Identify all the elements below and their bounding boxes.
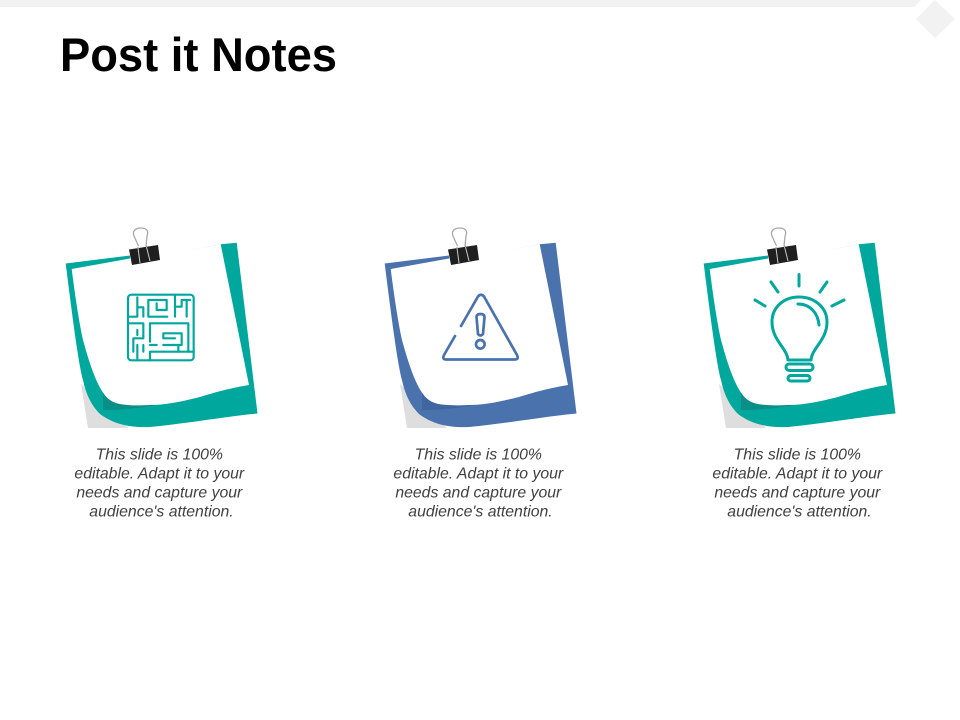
icon: maze xyxy=(128,295,194,360)
caption 2: editable. Adapt it to your xyxy=(393,466,564,482)
caption 1: editable. Adapt it to your xyxy=(74,466,245,482)
panel: note 1 maze xyxy=(66,228,258,520)
caption 3: needs and capture your xyxy=(714,484,881,502)
caption 2: audience's attention. xyxy=(408,504,553,520)
caption 3: audience's attention. xyxy=(727,504,872,520)
panel: note 2 warning xyxy=(385,228,576,520)
caption 2: needs and capture your xyxy=(395,484,562,502)
note 1 paper xyxy=(66,243,258,428)
note 2 paper xyxy=(385,243,576,428)
panel: note 3 lightbulb xyxy=(704,228,896,520)
caption 1: needs and capture your xyxy=(76,484,243,502)
icon: warning triangle xyxy=(443,295,518,360)
caption 3: editable. Adapt it to your xyxy=(712,466,883,482)
top bar decoration xyxy=(0,0,955,38)
title: Post it Notes xyxy=(60,28,337,81)
binder clip 2 xyxy=(448,228,479,265)
caption 3: This slide is 100% xyxy=(734,446,861,464)
caption 2: This slide is 100% xyxy=(415,446,542,464)
binder clip 1 xyxy=(129,228,160,265)
caption 1: This slide is 100% xyxy=(96,446,223,464)
binder clip 3 xyxy=(767,228,798,265)
note 3 paper xyxy=(704,243,896,428)
caption 1: audience's attention. xyxy=(89,504,234,520)
icon: lightbulb xyxy=(755,274,844,381)
